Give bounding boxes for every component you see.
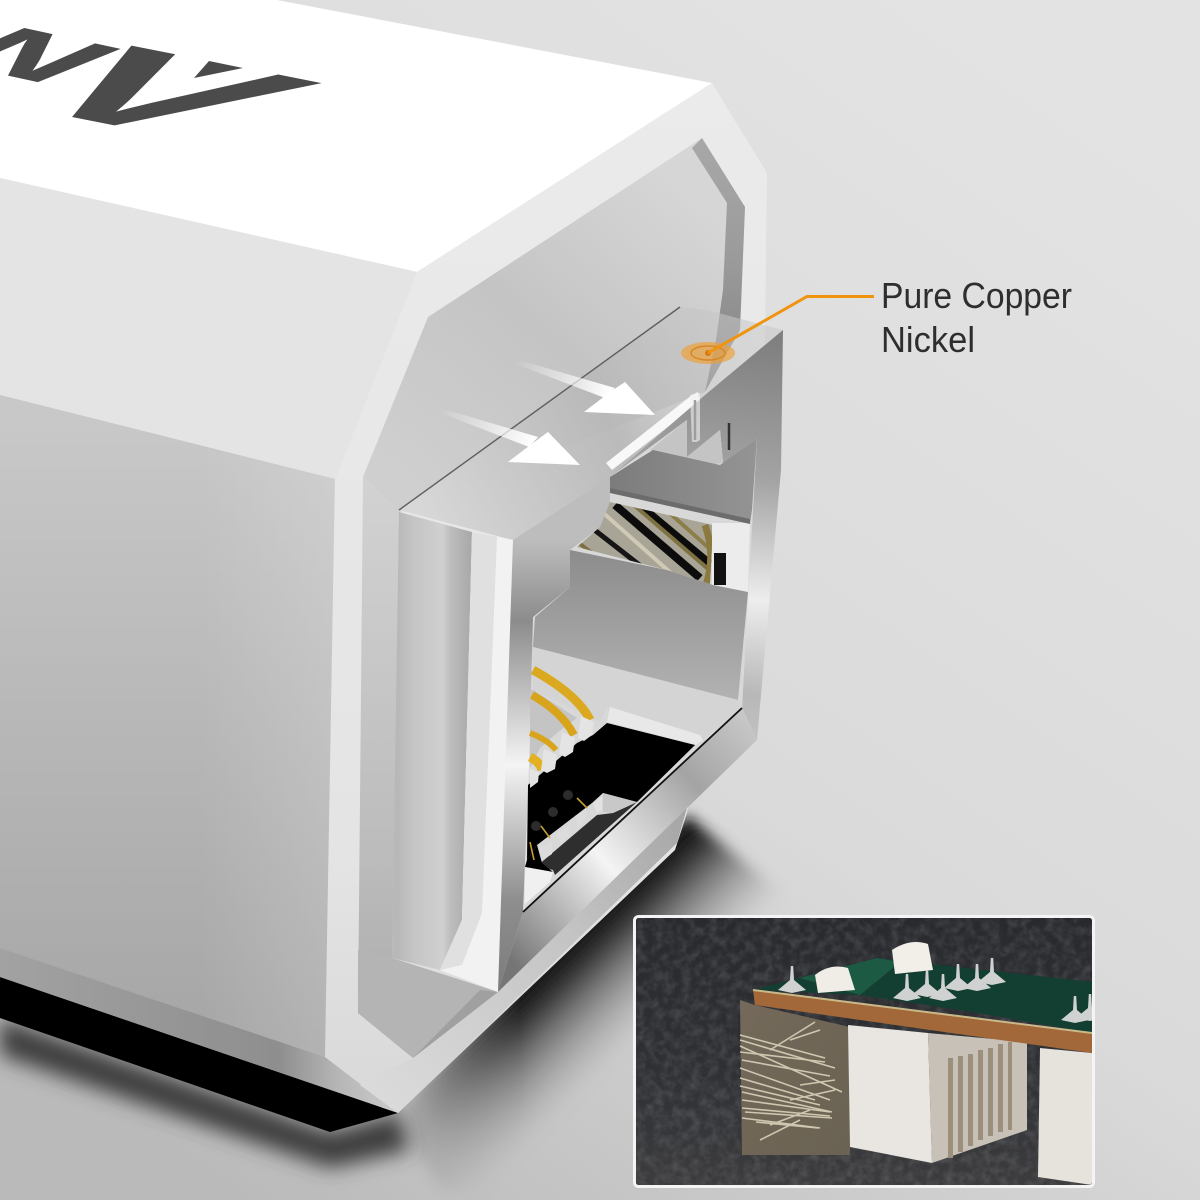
- upper notch teeth: [650, 420, 723, 470]
- gold pins and tabs: [530, 670, 594, 788]
- inner right wall: [692, 138, 745, 392]
- right jack: [1038, 1048, 1092, 1185]
- lower metal panel: [533, 550, 748, 700]
- floor shadow: [0, 815, 790, 1190]
- callout label: Pure Copper: [881, 275, 1072, 316]
- callout label: Nickel: [881, 319, 975, 360]
- plate highlight: [606, 392, 700, 470]
- right white side: [712, 523, 750, 592]
- white strip: [440, 532, 513, 992]
- plate left column: [392, 512, 472, 970]
- plate front right: [610, 330, 783, 740]
- bottom ledge: [525, 867, 553, 904]
- white bumps: [815, 967, 855, 993]
- lower rim band: [360, 808, 687, 1113]
- callout leader line: [708, 296, 874, 353]
- lower recess band: [358, 950, 498, 1058]
- white jack front: [848, 1025, 932, 1163]
- solder wires: [740, 1022, 842, 1140]
- plate front bottom: [498, 708, 757, 992]
- recess left of plate: [358, 477, 498, 1058]
- connector body: [0, 0, 767, 1113]
- inset photo: [634, 916, 1104, 1186]
- jack side with slots: [928, 1033, 1027, 1163]
- side face: [0, 395, 335, 1057]
- opening back: [525, 420, 757, 910]
- upper metal panel: [610, 438, 757, 523]
- top face: [0, 0, 712, 272]
- PCB brown edge: [753, 990, 1092, 1053]
- arrow upper: [513, 361, 655, 415]
- solder pins: [778, 958, 1104, 1023]
- lower contacts: [525, 790, 637, 875]
- metal shield: [740, 1000, 850, 1155]
- gold contacts upper: [577, 502, 712, 584]
- felt backdrop: [636, 918, 1092, 1185]
- end rim: [325, 83, 767, 1113]
- marker: coating point: [681, 342, 735, 364]
- inner panel: [363, 138, 745, 512]
- plate top surface: [399, 307, 783, 540]
- cavity floor: [533, 647, 742, 743]
- arrow lower: [438, 410, 580, 465]
- PCB green: [753, 958, 1092, 1033]
- lower chamfer: [0, 948, 398, 1113]
- inset frame: [634, 916, 1094, 1186]
- faceplate: [392, 307, 783, 992]
- plate seam line: [399, 307, 680, 510]
- black cavity: [527, 723, 695, 860]
- plate front: [498, 477, 610, 992]
- upper chamfer: [0, 178, 417, 479]
